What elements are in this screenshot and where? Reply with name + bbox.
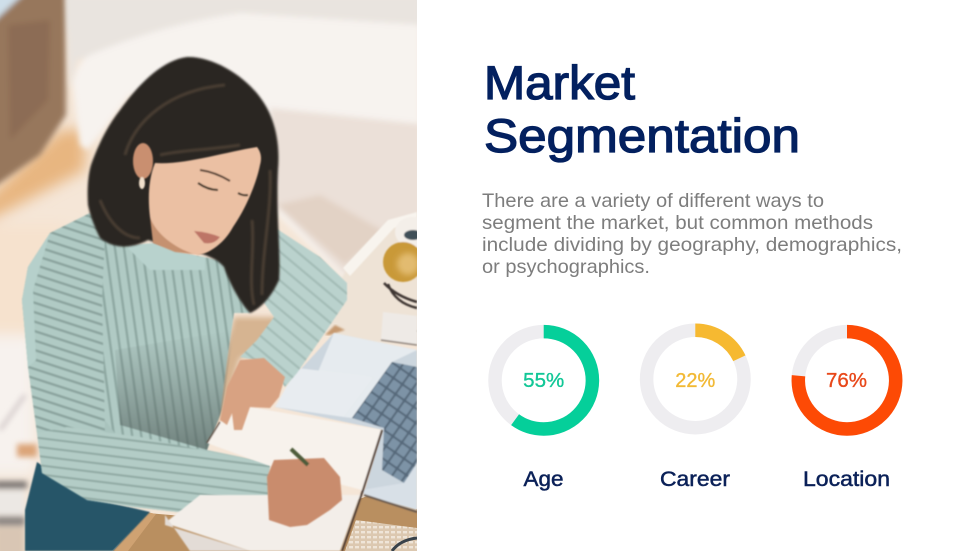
label: Location: Location — [803, 468, 890, 491]
title — [484, 56, 800, 162]
title: Market — [484, 56, 635, 109]
sweater base — [104, 420, 254, 460]
hair highlights — [100, 85, 270, 305]
sofa — [66, 0, 420, 280]
upper arm — [22, 213, 105, 437]
donut chart: Age 55%: 55% — [523, 370, 564, 392]
face and neck — [133, 143, 261, 255]
floor and rug — [0, 122, 94, 476]
forearm — [38, 427, 270, 510]
hair — [88, 57, 279, 313]
donut chart: Career 22% — [647, 330, 744, 428]
body text: or psychographics. — [482, 256, 650, 278]
donut chart: Career 22%: 22% — [675, 370, 716, 392]
label: Career: Career — [660, 468, 730, 491]
sweater body — [102, 242, 244, 449]
label: Age: Age — [524, 468, 564, 491]
title: Segmentation — [484, 109, 800, 162]
jeans — [25, 462, 150, 551]
coffee cup and glasses — [380, 222, 417, 346]
table tray and desk — [113, 212, 420, 551]
body text: include dividing by geography, demographics, — [482, 234, 902, 256]
hand on the notebook — [220, 358, 285, 430]
donut chart: Age 55% — [495, 332, 592, 429]
right sleeve — [240, 227, 347, 387]
body text: There are a variety of different ways to — [482, 190, 824, 212]
body text: segment the market, but common methods — [482, 212, 873, 234]
donut chart: Location 76% — [798, 332, 896, 429]
laptop — [275, 333, 417, 512]
body text — [482, 190, 902, 278]
writing hand and pen — [267, 449, 342, 527]
sweater — [22, 213, 347, 522]
photo: woman writing in a notebook at a laptop — [0, 0, 440, 551]
donut chart: Location 76%: 76% — [826, 370, 867, 392]
notebook — [165, 407, 382, 551]
wicker basket — [0, 0, 66, 190]
